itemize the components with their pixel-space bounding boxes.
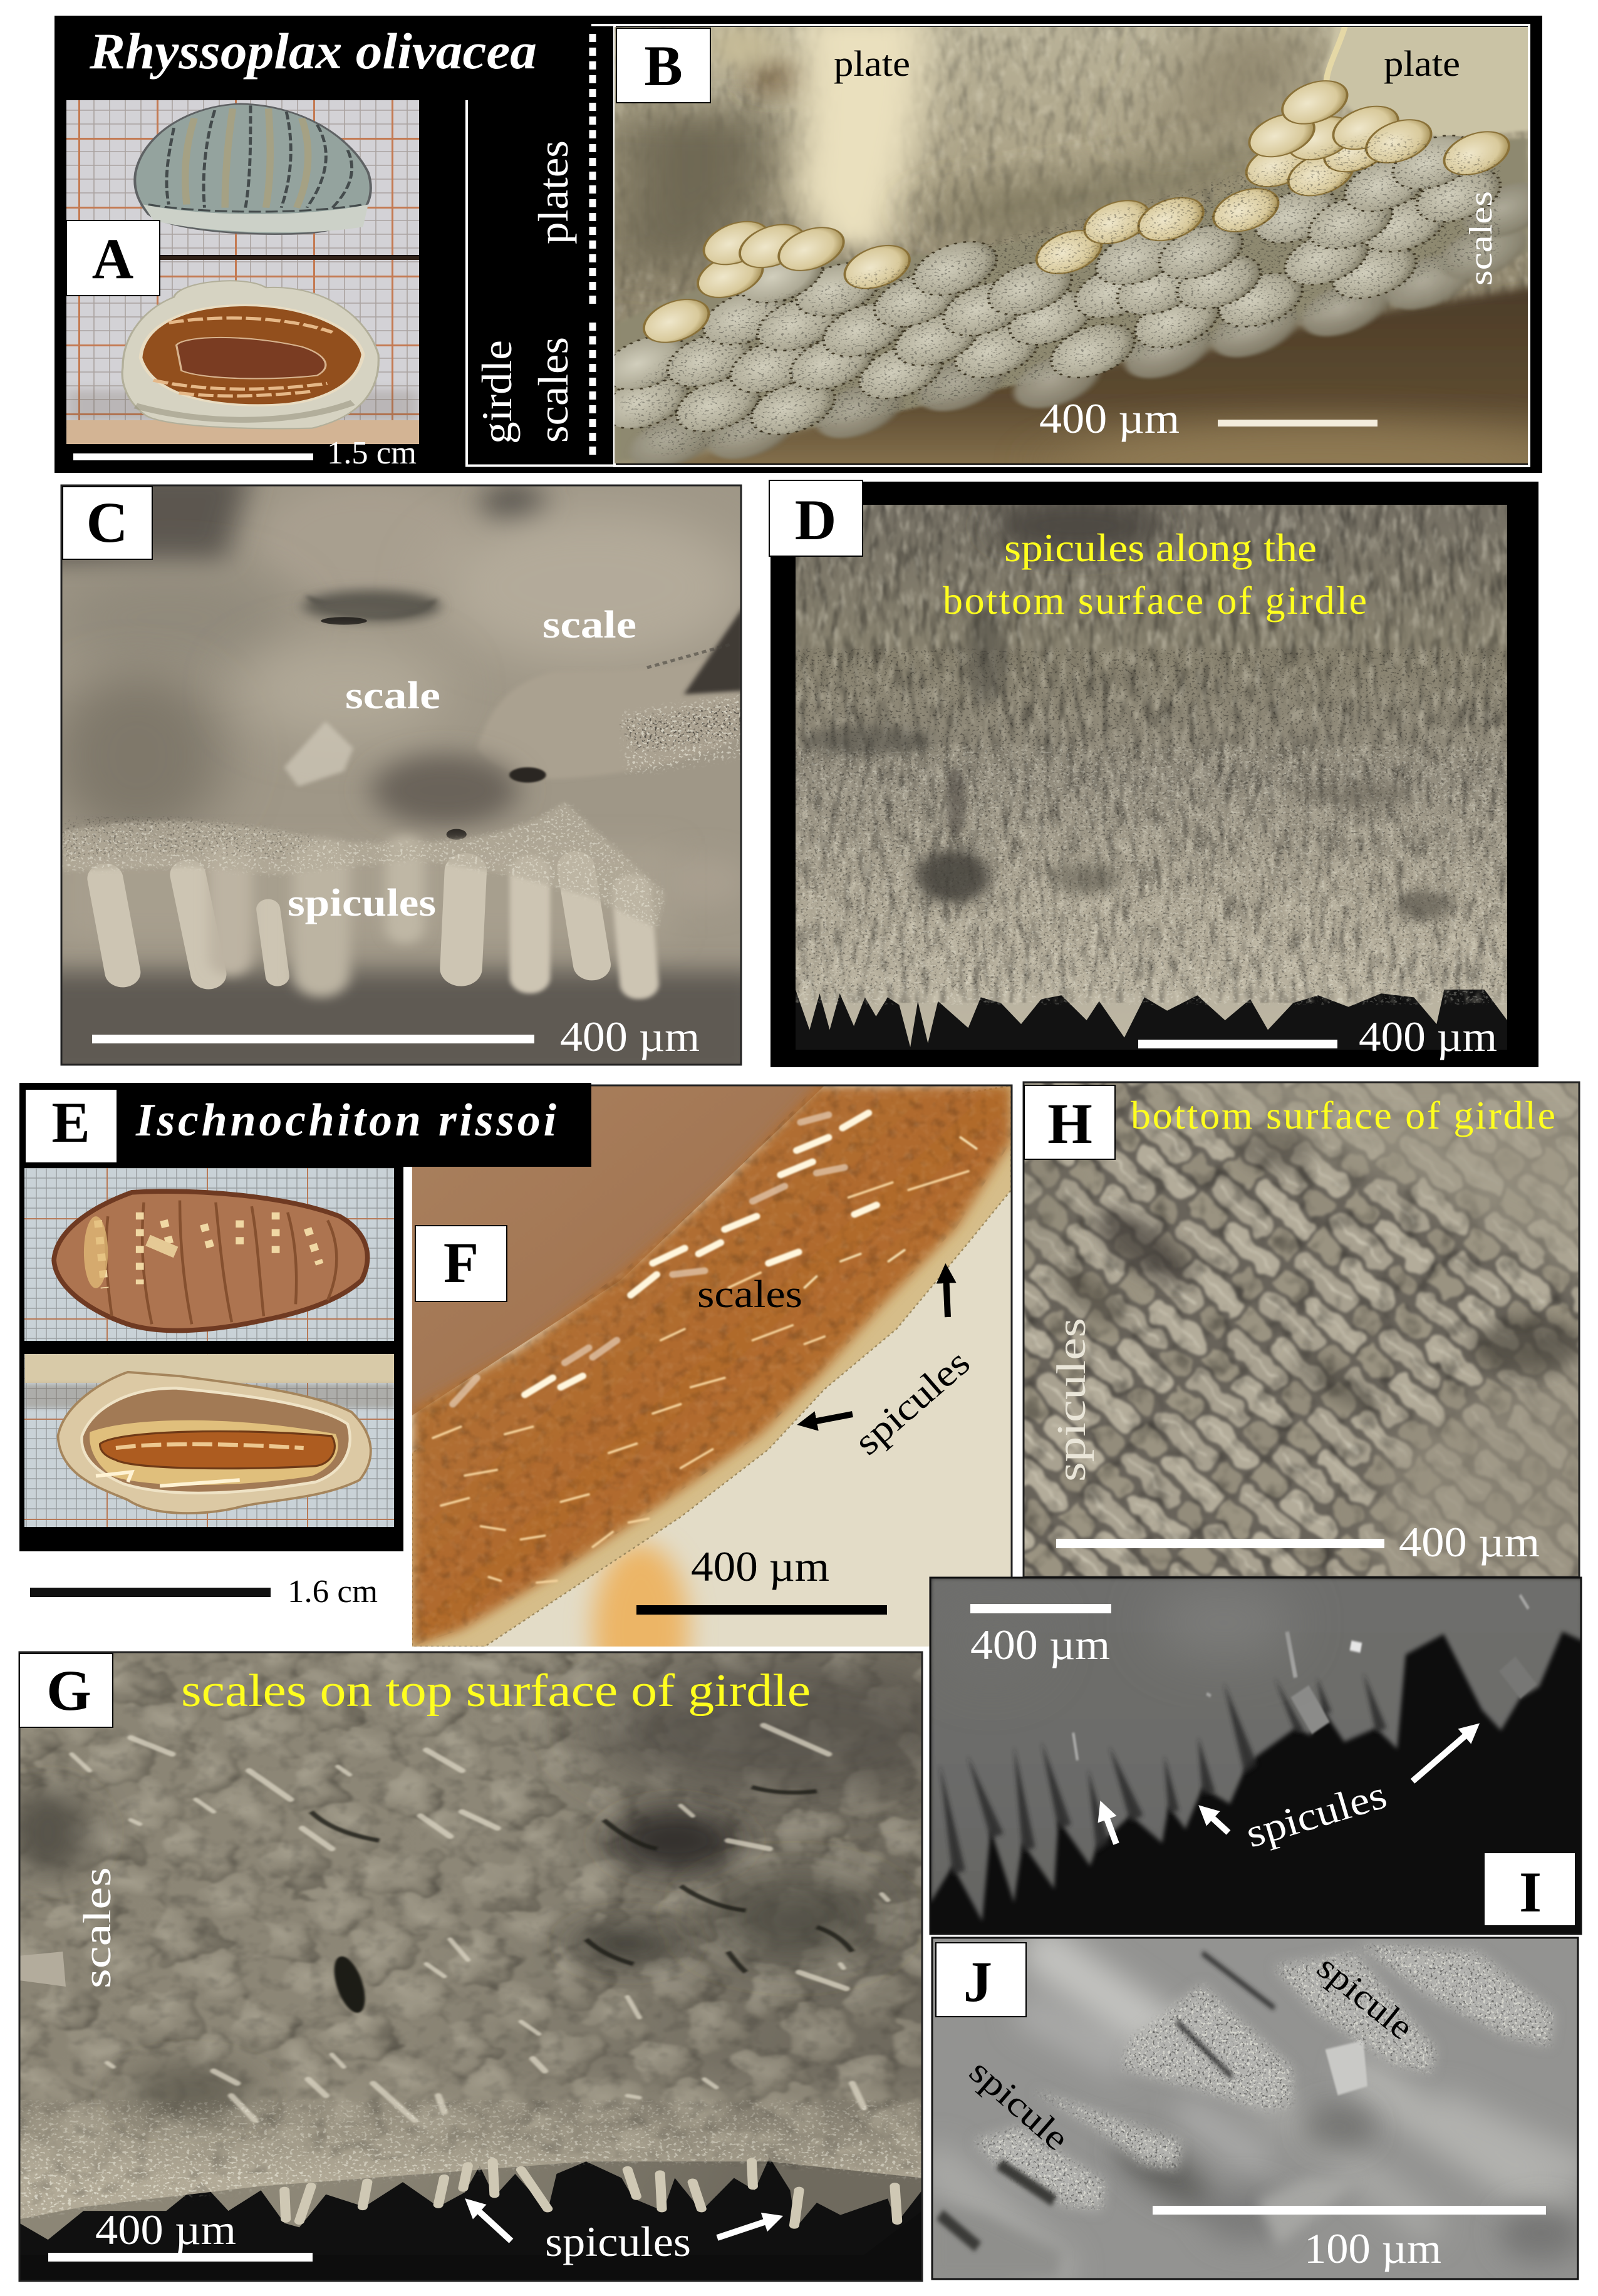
C annotations: spicules bbox=[288, 882, 436, 924]
rotated labels plates, scales, girdle: scales bbox=[529, 337, 577, 443]
dark lower field bbox=[32, 970, 766, 1085]
girdle scales, blurred lower row bbox=[612, 175, 1568, 475]
tissue with spicule teeth bbox=[930, 1578, 1582, 1921]
dark patches bbox=[991, 497, 1162, 554]
label I bbox=[1485, 1853, 1575, 1925]
patch left bbox=[19, 1952, 66, 1987]
textured spicule bodies bbox=[932, 1944, 1554, 2279]
scale bar D: 400 µm bbox=[1359, 1013, 1497, 1060]
label H bbox=[1024, 1085, 1115, 1159]
label J: J bbox=[963, 1950, 992, 2014]
scale bar J bbox=[1153, 2206, 1546, 2272]
species title: Rhyssoplax olivacea bbox=[89, 23, 537, 80]
black lower band bbox=[19, 2211, 922, 2282]
panel H: bottom surface of girdle spicules bbox=[996, 1058, 1598, 1603]
scale bar G: 400 µm bbox=[95, 2206, 236, 2253]
scale bar 1.6 cm: 1.6 cm bbox=[288, 1574, 378, 1610]
girdle scales, focused rows bbox=[588, 128, 1517, 442]
yellow caption H: bottom surface of girdle bbox=[1131, 1093, 1555, 1137]
black backing E bbox=[19, 1083, 591, 1551]
dark cracks and top-right shadow bbox=[586, 1660, 977, 1799]
scale bar F bbox=[636, 1543, 887, 1615]
photo: ventral chiton on grid bbox=[24, 1354, 395, 1527]
labels plate: plate bbox=[1384, 43, 1460, 84]
scale bar H: 400 µm bbox=[1399, 1518, 1540, 1566]
frame F bbox=[412, 1085, 1012, 1647]
labels plate: plate bbox=[834, 43, 910, 84]
scale bar C bbox=[92, 1013, 700, 1060]
label D bbox=[769, 480, 863, 556]
label spicules I: spicules bbox=[1241, 1772, 1391, 1856]
blurred light bands bbox=[940, 1953, 1575, 2270]
black backing bbox=[54, 16, 1542, 473]
dark wedges between spicules bbox=[940, 1673, 1386, 1875]
label A bbox=[66, 220, 160, 296]
label E: E bbox=[51, 1090, 90, 1154]
label J bbox=[936, 1943, 1026, 2017]
scale bar 1.5 cm bbox=[73, 435, 417, 471]
scale bar F: 400 µm bbox=[691, 1543, 829, 1590]
scale bar 1.5 cm: 1.5 cm bbox=[327, 435, 417, 471]
speckle on spicule bodies bbox=[973, 1944, 1554, 2210]
panel E: Ischnochiton rissoi overview bbox=[19, 1083, 591, 1610]
girdle band cream fringe bbox=[412, 1085, 1011, 1647]
arrow G left bbox=[472, 2205, 511, 2241]
panel I: spicule edge on dark background bbox=[930, 1578, 1582, 1936]
label D: D bbox=[795, 488, 836, 552]
scale bar H bbox=[1056, 1518, 1540, 1566]
upper soft shapes bbox=[41, 468, 748, 840]
yellow caption G: scales on top surface of girdle bbox=[181, 1665, 811, 1717]
dark mid shadow bbox=[937, 132, 1273, 240]
rotated labels plates, scales, girdle: girdle bbox=[473, 340, 521, 444]
scale bar B bbox=[1039, 395, 1377, 442]
scale bar D bbox=[1138, 1013, 1497, 1060]
C annotations: scale bbox=[345, 675, 440, 717]
speckles on scales bbox=[620, 132, 1501, 455]
label C: C bbox=[86, 490, 128, 554]
dark blurred shadows bbox=[1107, 2104, 1584, 2261]
rotated labels plates, scales, girdle: plates bbox=[529, 140, 577, 244]
girdle mass with spicule edge bbox=[19, 1652, 922, 2240]
label C bbox=[63, 487, 152, 559]
right plate bbox=[1324, 19, 1542, 138]
girdle band orange bbox=[412, 1085, 1011, 1647]
vertical streak texture bbox=[796, 505, 1507, 1003]
panel J: single spicule close-up bbox=[932, 1938, 1584, 2280]
frame C bbox=[61, 485, 741, 1065]
crust between scales and spicules bbox=[61, 802, 665, 928]
spicules bbox=[105, 836, 660, 1000]
label A: A bbox=[92, 227, 133, 291]
cream scales near the plate bbox=[631, 76, 1522, 348]
crystal fragment bbox=[1325, 2040, 1367, 2096]
frame J bbox=[932, 1938, 1578, 2279]
label G: G bbox=[46, 1658, 91, 1722]
bright scale highlights bbox=[71, 1725, 888, 2121]
arrow to spicules upper bbox=[946, 1273, 948, 1317]
yellow caption D: bottom surface of girdle bbox=[943, 578, 1367, 623]
photo: dorsal chiton on grid bbox=[24, 1168, 394, 1341]
orange glow bbox=[593, 1543, 688, 1716]
label G bbox=[19, 1653, 113, 1727]
label E bbox=[26, 1090, 117, 1162]
species title E: Ischnochiton rissoi bbox=[135, 1095, 556, 1146]
panel F: girdle edge with scales and spicules bbox=[412, 1085, 1012, 1716]
spicule light tips bbox=[284, 2161, 897, 2225]
panel C: scales and spicules bbox=[32, 468, 766, 1085]
label I: I bbox=[1519, 1860, 1542, 1924]
panel D: spicules on bottom surface of girdle bbox=[769, 480, 1538, 1067]
scale bar G bbox=[48, 2206, 313, 2262]
tan background bbox=[412, 1085, 824, 1415]
label F bbox=[415, 1226, 507, 1301]
divider between the two photos bbox=[66, 256, 419, 260]
lighter highlights bbox=[1073, 1595, 1528, 1761]
dark patches bbox=[1084, 1196, 1202, 1297]
labels spicule: spicule bbox=[1310, 1948, 1421, 2047]
frame H bbox=[1024, 1082, 1579, 1577]
panel G: scales on top surface of girdle bbox=[0, 1623, 977, 2282]
frame G bbox=[19, 1652, 922, 2281]
F annotations: scales bbox=[697, 1273, 802, 1316]
photo: dorsal chiton on graph paper bbox=[66, 100, 419, 255]
scale bar C: 400 µm bbox=[560, 1013, 700, 1060]
arrow I right bbox=[1413, 1730, 1472, 1781]
dark fissures bbox=[940, 1953, 1274, 2247]
scale bar I: 400 µm bbox=[970, 1621, 1110, 1668]
yellow caption D bbox=[943, 525, 1367, 623]
plate shadow left bbox=[615, 111, 776, 270]
scale bar B: 400 µm bbox=[1039, 395, 1180, 442]
C annotations: scale bbox=[542, 604, 636, 646]
fine texture bbox=[19, 1652, 922, 2207]
photo: ventral chiton on graph paper bbox=[66, 260, 419, 445]
label scales: scales bbox=[1463, 191, 1499, 286]
blur haze top-right and lower-right bbox=[1115, 1065, 1598, 1290]
scale bar J: 100 µm bbox=[1304, 2225, 1441, 2272]
label spicules G: spicules bbox=[545, 2218, 691, 2265]
damaged scale right bbox=[284, 606, 744, 840]
arrow to spicules lower bbox=[807, 1414, 853, 1423]
backing band behind scales bbox=[615, 138, 1528, 462]
dark substrate bbox=[589, 282, 1560, 477]
label F: F bbox=[444, 1231, 479, 1295]
blurred mass above fingers bbox=[61, 844, 672, 940]
bracket lines and dotted zones bbox=[467, 25, 1529, 466]
panel: Rhyssoplax olivacea overview, A and B bbox=[54, 16, 1579, 500]
label H: H bbox=[1047, 1092, 1092, 1156]
scale bar 1.6 cm bbox=[30, 1574, 378, 1610]
labels spicule: spicule bbox=[962, 2052, 1076, 2158]
label spicules H: spicules bbox=[1049, 1318, 1094, 1482]
bright plate bbox=[793, 19, 926, 246]
highlight streaks bbox=[433, 1113, 977, 1583]
label scales G: scales bbox=[76, 1867, 119, 1988]
F annotations bbox=[697, 1273, 978, 1463]
arrow I left bbox=[1104, 1810, 1116, 1844]
yellow caption D: spicules along the bbox=[1004, 525, 1317, 570]
arrow I middle bbox=[1206, 1812, 1228, 1833]
rotated labels plates, scales, girdle bbox=[473, 140, 577, 444]
labels spicule bbox=[962, 1948, 1421, 2158]
black frame D bbox=[770, 482, 1538, 1067]
frame I bbox=[930, 1578, 1581, 1934]
label B bbox=[616, 28, 710, 103]
arrow G right bbox=[717, 2219, 774, 2238]
scale bar I bbox=[970, 1604, 1111, 1668]
labels plate bbox=[834, 43, 1460, 84]
label B: B bbox=[644, 34, 683, 98]
C annotations bbox=[288, 604, 636, 924]
band mottling bbox=[412, 1085, 1011, 1647]
overlapping scales texture bbox=[0, 1623, 970, 2182]
photo D bbox=[796, 497, 1507, 1051]
F annotations: spicules bbox=[846, 1342, 978, 1463]
photo B: plates and scales bbox=[615, 27, 1528, 463]
